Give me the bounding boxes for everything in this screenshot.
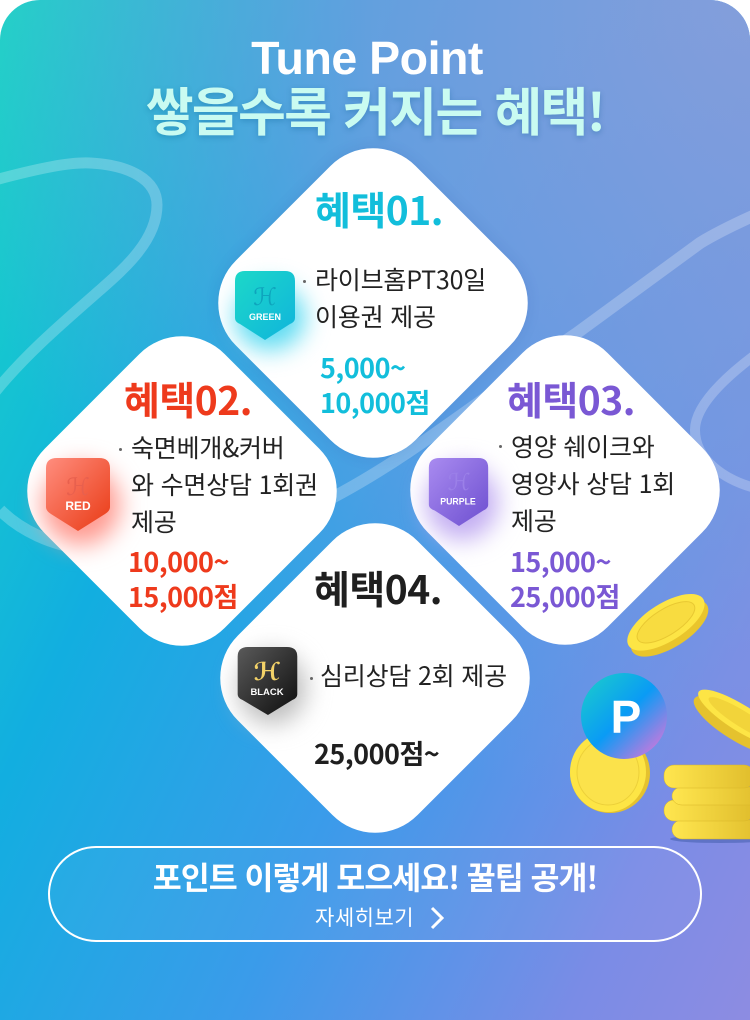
description: 영양사 상담 1회 (511, 465, 675, 501)
title: Tune Point (251, 32, 483, 84)
coin behind medal (570, 733, 650, 813)
panel: benefit 04 (220, 523, 530, 833)
icon: red badge (46, 458, 110, 531)
description (131, 429, 318, 539)
points (320, 347, 430, 421)
heading: 혜택04. (314, 560, 442, 616)
icon: green badge: GREEN (249, 312, 281, 322)
points (510, 541, 620, 615)
heading: 혜택01. (315, 181, 443, 237)
call to action button (48, 846, 702, 942)
points: 15,000~ (510, 541, 611, 580)
title: 쌓을수록 커지는 혜택! (146, 71, 604, 146)
points (128, 541, 238, 615)
coin stack (664, 765, 750, 843)
description: 제공 (131, 503, 177, 539)
title (146, 32, 604, 146)
points: 25,000점~ (314, 733, 439, 772)
icon: black badge (238, 647, 298, 715)
points: 25,000점 (510, 576, 620, 615)
description: 제공 (511, 502, 557, 538)
panel: benefit 03 (410, 335, 720, 645)
icon: red badge: RED (65, 499, 91, 513)
description: 영양 쉐이크와 (511, 428, 655, 464)
heading: 혜택02. (124, 371, 252, 427)
icon: coins and P medal (570, 594, 750, 843)
icon: green badge (235, 271, 295, 340)
icon: purple badge: PURPLE (440, 497, 476, 507)
icon: purple badge: ℋ (447, 468, 471, 496)
description: 심리상담 2회 제공 (320, 657, 507, 693)
button link: 자세히보기 (315, 902, 414, 932)
icon: purple badge (428, 458, 488, 526)
description: 이용권 제공 (315, 298, 436, 334)
description: 숙면베개&커버 (131, 429, 285, 465)
heading: 혜택03. (507, 371, 635, 427)
description: 라이브홈PT30일 (315, 261, 486, 297)
points: 10,000~ (128, 541, 229, 580)
icon: black badge: ℋ (254, 657, 281, 686)
panel: benefit 02 (24, 336, 337, 646)
coin right (686, 681, 750, 764)
icon: black badge: BLACK (250, 687, 284, 698)
panel: benefit 01 (218, 148, 528, 458)
P medal (581, 673, 667, 759)
coin top (619, 583, 717, 668)
description (315, 261, 486, 334)
icon: red badge: ℋ (66, 473, 90, 501)
button heading: 포인트 이렇게 모으세요! 꿀팁 공개! (153, 853, 597, 899)
description (511, 428, 675, 538)
points: 10,000점 (320, 382, 430, 421)
description: 와 수면상담 1회권 (131, 466, 318, 502)
P medal: P (611, 691, 641, 743)
points: 15,000점 (128, 576, 238, 615)
icon: green badge: ℋ (253, 283, 277, 311)
points: 5,000~ (320, 347, 406, 386)
